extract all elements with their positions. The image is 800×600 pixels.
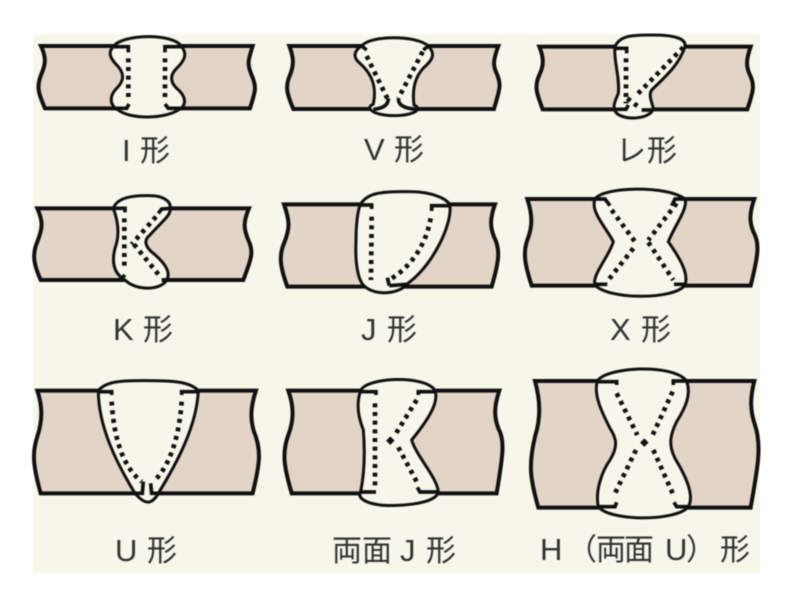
label: H（両面U）形: 形 [720, 534, 750, 567]
label: H（両面U）形: U [665, 532, 687, 567]
panel: J groove [281, 192, 498, 347]
label: レ形 [616, 135, 677, 168]
panel: U groove [34, 381, 259, 568]
panel: double J groove [284, 380, 503, 568]
label: H（両面U）形: 面 [624, 534, 654, 567]
label: U形 [115, 533, 177, 568]
label: 両面J形: 形 [426, 535, 456, 568]
panel: L groove [536, 35, 753, 168]
panel: K groove [34, 196, 251, 347]
label: K形: 形 [143, 314, 173, 347]
label: H（両面U）形 [540, 532, 750, 567]
label: H（両面U）形: ） [686, 534, 716, 567]
diagram: double J groove joint [284, 380, 503, 506]
label: I形 [122, 133, 170, 168]
label: V形: 形 [394, 134, 424, 167]
label: J形: J [361, 312, 376, 347]
label: H（両面U）形: H [540, 532, 562, 567]
label: J形: 形 [387, 314, 417, 347]
label: K形 [113, 312, 173, 347]
label: U形: 形 [147, 535, 177, 568]
diagram: I groove joint [38, 37, 255, 117]
diagram: J groove joint [281, 192, 498, 293]
panel: I groove [38, 37, 255, 168]
label: H（両面U）形: （ [567, 534, 597, 567]
label: X形: 形 [641, 314, 671, 347]
label: U形: U [115, 533, 137, 568]
label: I形: 形 [140, 135, 170, 168]
diagram: L groove joint [536, 35, 753, 118]
panel: X groove [525, 189, 757, 347]
label: J形 [361, 312, 417, 347]
diagram: K groove joint [34, 196, 251, 288]
label: X形: X [610, 312, 631, 347]
label: I形: I [122, 133, 131, 168]
label: 両面J形 [332, 533, 456, 568]
label: V形 [364, 132, 424, 167]
label: 両面J形: 両 [332, 535, 362, 568]
label: レ形: 形 [647, 135, 677, 168]
label: K形: K [113, 312, 134, 347]
diagram: V groove joint [287, 38, 500, 116]
label: 両面J形: J [400, 533, 416, 568]
label: X形 [610, 312, 671, 347]
panel: V groove [287, 38, 500, 167]
diagram: U groove joint [34, 381, 259, 502]
panel: H groove [531, 369, 759, 567]
diagram: H groove joint [531, 369, 759, 518]
label: レ形: レ [616, 135, 646, 168]
label: 両面J形: 面 [362, 535, 392, 568]
label: V形: V [364, 132, 385, 167]
diagram: X groove joint [525, 189, 757, 296]
label: H（両面U）形: 両 [596, 534, 626, 567]
